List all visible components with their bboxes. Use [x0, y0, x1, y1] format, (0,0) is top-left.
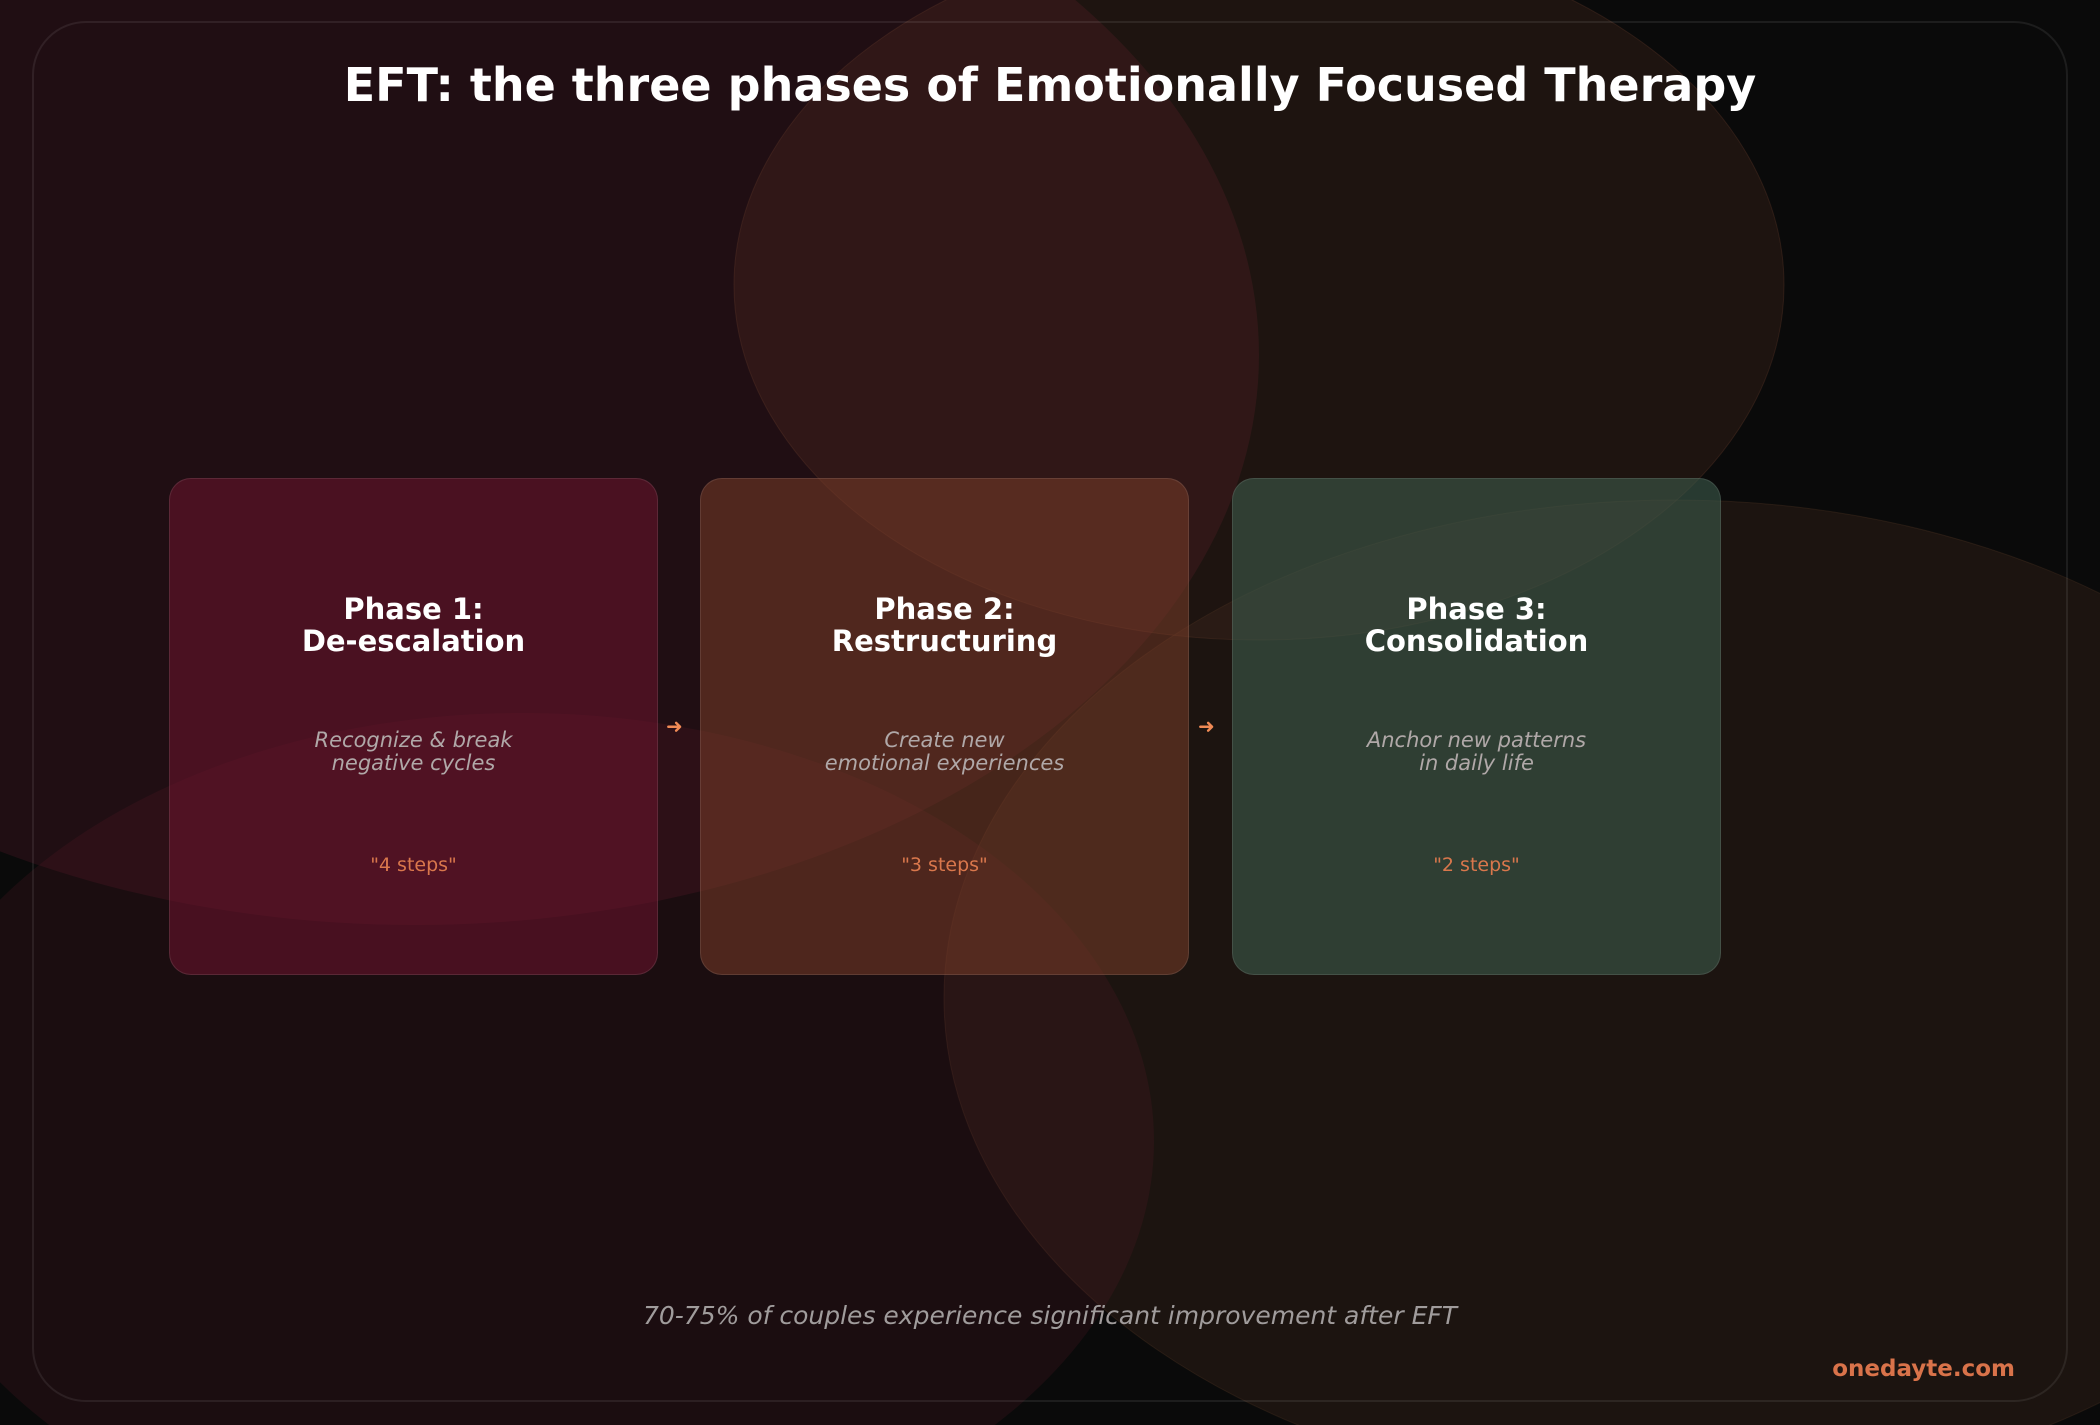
phase 2 description: emotional experiences — [825, 751, 1064, 775]
phase 1 heading: Phase 1: — [343, 592, 484, 626]
phase 2 steps: "3 steps" — [901, 854, 988, 876]
phase 3 heading — [1365, 592, 1588, 658]
phase 1 steps: "4 steps" — [370, 854, 457, 876]
panel: phase 2 — [700, 478, 1189, 975]
phase 1 heading — [302, 592, 525, 658]
phase 2 description: Create new — [884, 728, 1005, 752]
phase 3 heading: Phase 3: — [1406, 592, 1547, 626]
phase 2 description — [825, 728, 1064, 775]
phase 1 description: negative cycles — [332, 751, 495, 775]
phase 3 heading: Consolidation — [1365, 624, 1588, 658]
arrow 2: ➜ — [1198, 714, 1215, 738]
title: EFT: the three phases of Emotionally Focused Therapy — [344, 58, 1756, 112]
panel: phase 3 — [1232, 478, 1721, 975]
phase 2 heading — [832, 592, 1057, 658]
phase 3 steps: "2 steps" — [1433, 854, 1520, 876]
phase 2 heading: Restructuring — [832, 624, 1057, 658]
phase 1 description — [315, 728, 514, 775]
phase 1 description: Recognize & break — [315, 728, 512, 752]
arrow 1: ➜ — [666, 714, 683, 738]
phase 1 heading: De-escalation — [302, 624, 525, 658]
brand: onedayte.com — [1832, 1356, 2015, 1382]
footer note: 70-75% of couples experience significant improvement after EFT — [643, 1301, 1457, 1330]
phase 3 description: Anchor new patterns — [1367, 728, 1586, 752]
panel: phase 1 — [169, 478, 658, 975]
phase 2 heading: Phase 2: — [874, 592, 1015, 626]
phase 3 description: in daily life — [1419, 751, 1534, 775]
phase 3 description — [1366, 728, 1586, 775]
